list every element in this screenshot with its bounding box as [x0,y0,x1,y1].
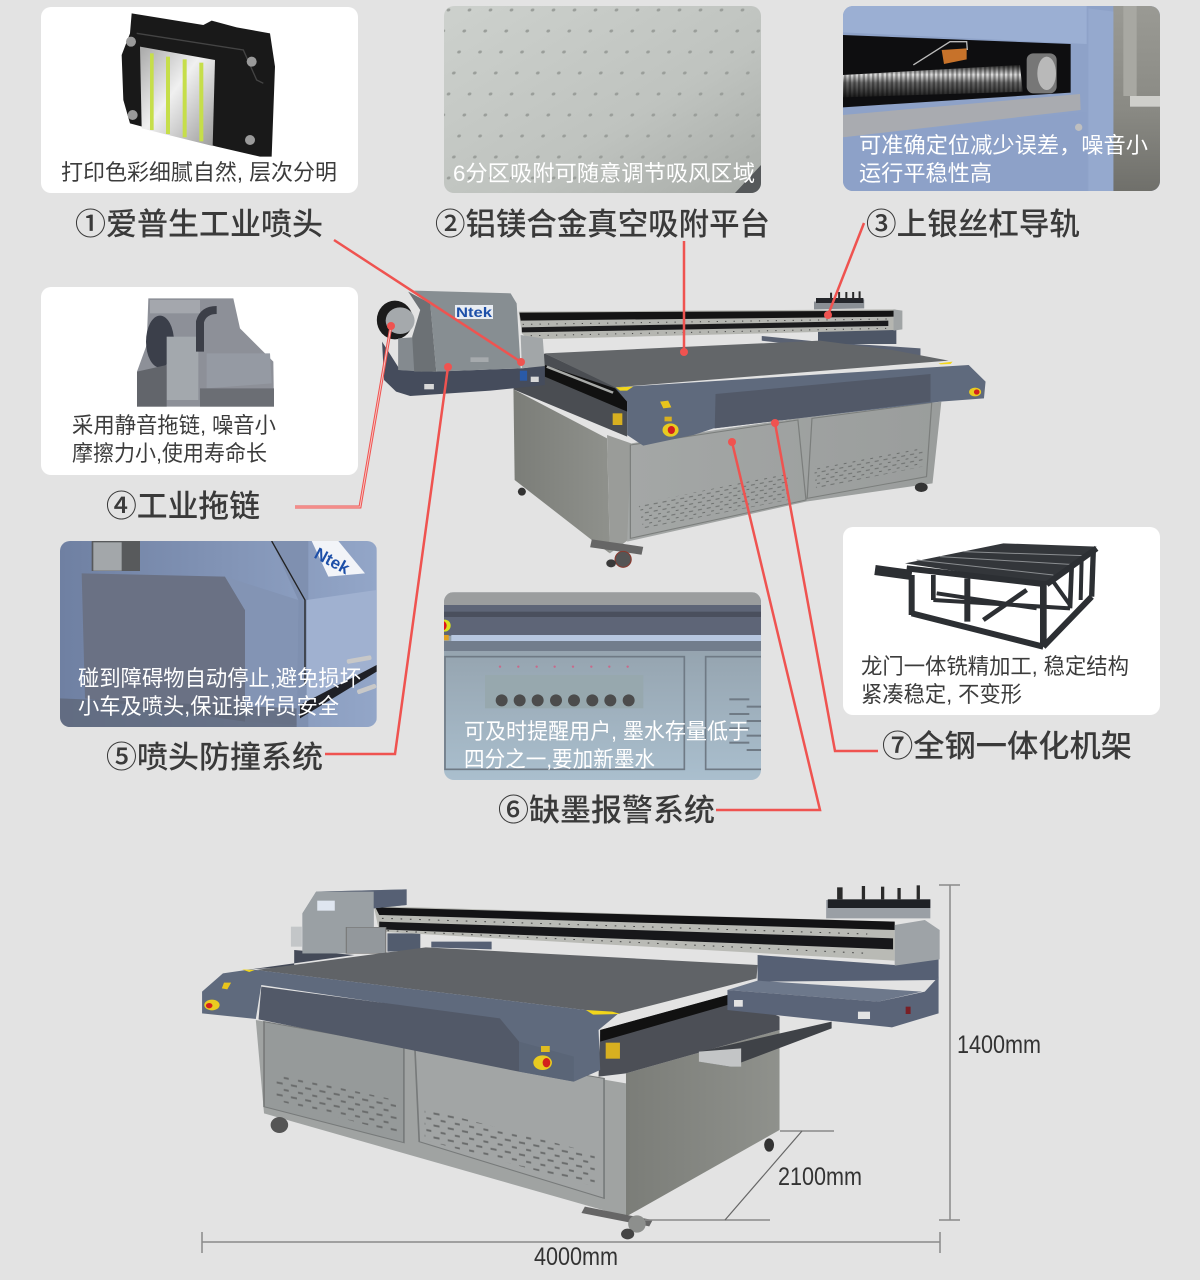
panel: ball screw card [843,6,1160,193]
arrow: ink alarm callout [716,438,820,810]
icon: printhead photo [122,13,275,157]
panel: steel frame card: 紧凑稳定, 不变形 [861,682,1022,707]
panel: drag chain card: 摩擦力小,使用寿命长 [72,441,267,466]
logo: Ntek [456,304,492,320]
arrow: vacuum table callout [680,241,688,356]
caption: 碰到障碍物自动停止,避免损坏 [78,666,361,691]
panel: drag chain card [41,287,358,475]
arrow: drag chain callout [295,322,395,507]
heading 1: ①爱普生工业喷头 [75,207,323,242]
arrow: frame callout [771,419,878,751]
dimension: depth 2100mm: 2100mm [778,1163,862,1191]
dimension: width 4000mm: 4000mm [534,1243,618,1271]
panel: steel frame card [843,527,1160,715]
connector lines [295,223,878,810]
heading 3: ③上银丝杠导轨 [866,207,1080,242]
logo: Ntek [311,544,353,578]
panel: anti-collision card: 小车及喷头,保证操作员安全 [78,694,339,719]
arrow: anti-collision callout [325,363,452,754]
arrow: guide rail callout [824,223,864,319]
caption: 打印色彩细腻自然, 层次分明 [61,160,337,185]
arrow: nozzle callout [334,240,525,366]
caption: 6分区吸附可随意调节吸风区域 [453,161,755,186]
panel: ink alarm card [439,592,766,781]
panel: printhead card [41,7,358,193]
printer: main annotated photo [377,291,986,567]
heading 6: ⑥缺墨报警系统 [498,793,715,828]
printer: dimension photo [202,885,940,1239]
heading 5: ⑤喷头防撞系统 [106,740,323,775]
icon: steel frame photo [875,543,1097,647]
dimension: height 1400mm: 1400mm [957,1031,1041,1059]
caption: 采用静音拖链, 噪音小 [72,413,276,438]
caption: 龙门一体铣精加工, 稳定结构 [861,654,1129,679]
panel: vacuum table card [444,6,761,193]
icon: drag chain photo [137,298,274,407]
panel: ball screw card: 运行平稳性高 [859,161,992,186]
heading 7: ⑦全钢一体化机架 [882,729,1132,764]
panel: anti-collision card [60,540,377,730]
caption: 可准确定位减少误差，噪音小 [859,133,1148,158]
dimension: depth 2100mm [645,1131,862,1220]
heading 2: ②铝镁合金真空吸附平台 [435,207,770,242]
heading 4: ④工业拖链 [106,489,260,524]
panel: ink alarm card: 四分之一,要加新墨水 [464,747,655,772]
caption: 可及时提醒用户, 墨水存量低于 [464,719,749,744]
